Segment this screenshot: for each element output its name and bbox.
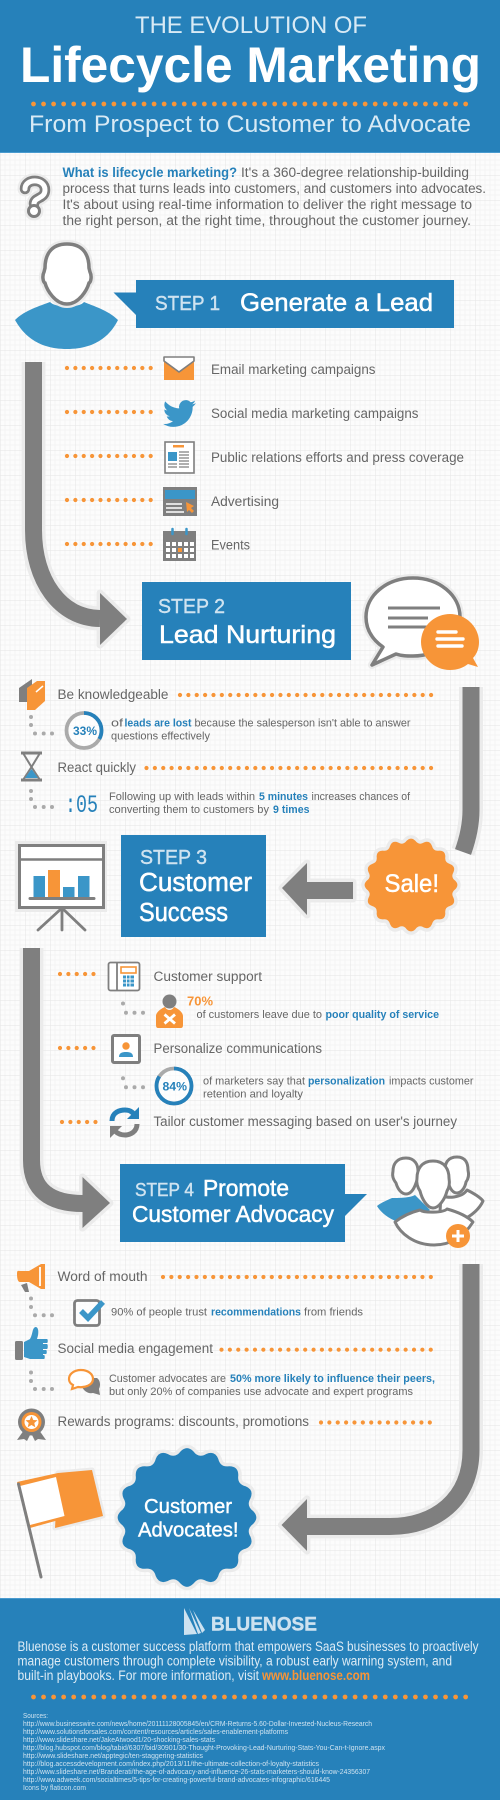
text: what is lifecycle marketing <box>62 165 486 228</box>
panel: step 2 banner <box>142 582 351 660</box>
text: what is lifecycle marketing: It's about using real-time information to deliver the right message to <box>62 197 472 212</box>
step 1 label: STEP 1 <box>155 293 220 315</box>
list: advocacy tactics <box>15 1264 435 1441</box>
badge: customer advocates <box>118 1448 256 1587</box>
icon: unhappy customer <box>156 994 183 1028</box>
chart: 33% ring: 33% <box>73 724 97 738</box>
icon: person <box>15 244 118 349</box>
stat: personalization <box>203 1076 474 1101</box>
text: what is lifecycle marketing: the right person, at the right time, throughout the customer journey. <box>62 213 471 228</box>
stat: digital time: :05 <box>65 791 98 820</box>
word of mouth label: Word of mouth <box>58 1269 148 1284</box>
stat: five minutes: increases chances of <box>312 791 411 803</box>
step 2 heading: Lead Nurturing <box>159 621 336 649</box>
press label: Public relations efforts and press coverage <box>211 450 464 465</box>
title line 2: Lifecycle Marketing <box>20 37 481 93</box>
stat: advocates influence: Customer advocates are <box>109 1373 226 1385</box>
icon: speech bubbles <box>366 578 479 670</box>
step 1 heading: Generate a Lead <box>240 289 433 317</box>
stat: trust recommendations: 90% of people trust <box>111 1307 207 1319</box>
stat: advocates influence <box>109 1373 435 1398</box>
icon: portrait <box>112 1036 140 1062</box>
arrow: step 3 to step 4 <box>32 948 110 1228</box>
arrow: step 4 to advocates <box>282 1264 471 1551</box>
stat: personalization: personalization <box>308 1076 385 1088</box>
text: sources: Icons by flaticon.com <box>23 1785 86 1792</box>
icon: customer group <box>377 1157 483 1248</box>
stat: personalization: retention and loyalty <box>203 1089 304 1101</box>
panel: step 4 banner: Customer Advocacy <box>132 1201 334 1227</box>
subtitle: From Prospect to Customer to Advocate <box>29 111 471 138</box>
react quickly label: React quickly <box>58 760 136 775</box>
text: sources: http://www.businesswire.com/news/home/20111128005845/en/CRM-Returns-5.60-Dollar-Invested-Nucleus-Research <box>23 1721 372 1728</box>
text: sources: http://blog.accessdevelopment.com/index.php/2013/11/the-ultimate-collection-of-loyalty-statistics <box>23 1761 319 1768</box>
stat: customers leave <box>196 1009 439 1021</box>
text: sources: http://www.adweek.com/socialtimes/5-tips-for-creating-powerful-brand-advocates-infographic/616445 <box>23 1777 330 1784</box>
panel: step 3 banner <box>121 835 266 937</box>
stat: leads lost: questions effectively <box>111 731 211 743</box>
email label: Email marketing campaigns <box>211 362 376 377</box>
text: sources: Sources: <box>23 1713 48 1720</box>
step 3 heading: Customer <box>139 869 253 897</box>
text: sources <box>23 1713 385 1792</box>
title line 1: THE EVOLUTION OF <box>135 12 367 39</box>
text: what is lifecycle marketing: What is lifecycle marketing? <box>62 165 237 180</box>
list: customer success tips <box>60 962 474 1138</box>
list: lead nurturing tips <box>19 679 435 820</box>
social label: Social media marketing campaigns <box>211 406 419 421</box>
icon: thumbs up <box>15 1327 48 1360</box>
badge: sale: Sale! <box>384 870 439 898</box>
badge: sale <box>365 839 457 931</box>
icon: calendar <box>163 529 196 561</box>
panel: header <box>0 0 500 153</box>
rewards label: Rewards programs: discounts, promotions <box>58 1414 309 1429</box>
events label: Events <box>211 538 250 552</box>
panel: step 3 banner: Success <box>139 899 228 927</box>
stat: five minutes: 9 times <box>273 804 310 816</box>
stat: customers leave: poor quality of service <box>326 1009 439 1021</box>
panel: step 4 banner <box>120 1164 367 1242</box>
arrow: step 2 to sale <box>463 687 471 852</box>
personalize label: Personalize communications <box>154 1041 322 1056</box>
text: sources: http://www.slideshare.net/JakeAtwood1/20-shocking-sales-stats <box>23 1737 215 1744</box>
arrow: step 1 to step 2 <box>34 362 127 645</box>
step 4 heading: Promote <box>203 1175 289 1201</box>
icon: twitter bird <box>163 400 196 427</box>
badge: customer advocates: Customer <box>144 1495 232 1518</box>
icon: advertising <box>163 487 197 516</box>
icon: email <box>164 357 194 380</box>
stat: five minutes: Following up with leads within <box>109 791 255 803</box>
icon: megaphone <box>17 1264 45 1292</box>
stat: advocates influence: but only 20% of companies use advocate and expert programs <box>109 1386 414 1398</box>
advertising label: Advertising <box>211 494 279 509</box>
text: sources: http://www.slideshare.net/Branderati/the-age-of-advocacy-and-influence-26-stats-marketers-should-know-24356307 <box>23 1769 370 1776</box>
icon: books <box>19 679 45 710</box>
social engagement label: Social media engagement <box>58 1341 213 1356</box>
text: what is lifecycle marketing: process that turns leads into customers, and customers into advocates. <box>62 181 486 196</box>
chart: 84% ring <box>156 1068 192 1104</box>
stat: 70%: 70% <box>187 994 213 1009</box>
stat: leads lost: because the salesperson isn't able to answer <box>194 718 411 730</box>
stat: personalization: of marketers say that <box>203 1076 305 1088</box>
chart: 84% ring: 84% <box>162 1080 187 1094</box>
text: sources: http://blog.hubspot.com/blog/tabid/6307/bid/30901/30-Thought-Provoking-Lead-Nurturing-Stats-You-Can-t-Ignore.aspx <box>23 1745 385 1752</box>
icon: award ribbon <box>17 1408 46 1441</box>
text: about bluenose <box>18 1639 479 1683</box>
text: about bluenose: manage customers through complete visibility, a robust early warning system, and <box>18 1654 452 1668</box>
panel: footer <box>0 1598 500 1800</box>
text: sources: http://www.slideshare.net/apptegic/ten-staggering-statistics <box>23 1753 203 1760</box>
stat: leads lost: leads are lost <box>124 718 192 730</box>
logo: bluenose: BLUENOSE <box>211 1615 317 1636</box>
text: about bluenose: www.bluenose.com <box>261 1668 370 1683</box>
stat: five minutes: 5 minutes <box>259 791 308 803</box>
stat: trust recommendations: from friends <box>304 1307 364 1319</box>
icon: phone <box>108 962 140 990</box>
icon: presentation board <box>17 843 105 930</box>
badge: customer advocates: Advocates! <box>138 1519 238 1542</box>
chart: 33% ring <box>66 713 102 748</box>
icon: checkbox <box>74 1300 103 1326</box>
stat: leads lost <box>111 718 411 743</box>
stat: advocates influence: 50% more likely to influence their peers, <box>230 1373 435 1385</box>
icon: newspaper <box>165 442 194 473</box>
icon: question mark <box>25 181 45 218</box>
stat: trust recommendations: recommendations <box>211 1307 301 1319</box>
logo: bluenose <box>184 1608 317 1636</box>
stat: five minutes: converting them to customers by <box>109 804 270 816</box>
stat: trust recommendations <box>111 1307 364 1319</box>
arrow: sale to step 3 <box>282 863 353 915</box>
stat: personalization: impacts customer <box>389 1076 474 1088</box>
icon: flag <box>17 1470 103 1577</box>
be knowledgeable label: Be knowledgeable <box>58 687 168 702</box>
customer support label: Customer support <box>154 969 262 984</box>
stat: leads lost: of <box>111 718 124 730</box>
icon: sync arrows <box>110 1107 139 1138</box>
stat: five minutes <box>109 791 411 816</box>
text: about bluenose: built-in playbooks. For more information, visit <box>18 1668 259 1683</box>
icon: chat bubbles <box>69 1370 100 1395</box>
stat: customers leave: of customers leave due to <box>196 1009 322 1021</box>
tailor label: Tailor customer messaging based on user's journey <box>154 1114 457 1129</box>
icon: hourglass <box>21 753 42 780</box>
step 4 label: STEP 4 <box>135 1180 194 1200</box>
text: sources: http://www.solutionsforsales.com/content/resources/articles/sales-enablement-platforms <box>23 1729 288 1736</box>
list: lead generation channels <box>67 357 464 561</box>
step 2 label: STEP 2 <box>158 596 225 618</box>
step 3 label: STEP 3 <box>140 847 207 869</box>
panel: step 1 banner <box>114 280 454 328</box>
text: what is lifecycle marketing: It's a 360-degree relationship-building <box>241 165 469 180</box>
